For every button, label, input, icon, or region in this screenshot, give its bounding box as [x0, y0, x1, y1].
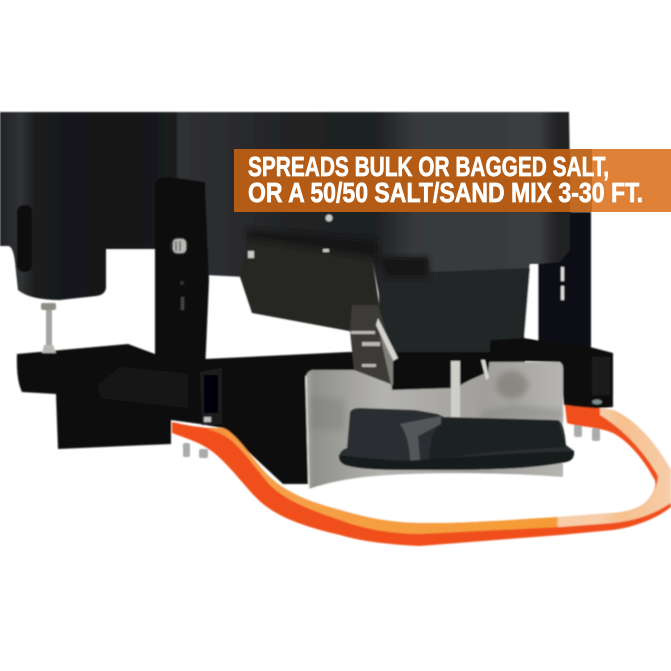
main hopper tank: [177, 112, 571, 300]
spinner disc: [339, 408, 574, 470]
steel latch bracket: [350, 305, 398, 385]
banner strip over dark machine: [234, 149, 570, 212]
banner: [234, 149, 671, 212]
spreader machine: [0, 112, 671, 546]
banner overlap on post: [570, 149, 592, 212]
chute top shadow: [247, 229, 378, 258]
spinner right block: [428, 417, 566, 462]
spinner rim: [339, 451, 574, 470]
spinner vane highlight: [400, 416, 441, 462]
orange guard bar: [172, 405, 671, 546]
left square tube end: [200, 368, 222, 425]
right tube bolt: [592, 400, 602, 404]
right post slots: [561, 267, 564, 300]
small blade strip: [481, 360, 489, 380]
banner strip on white: [234, 149, 671, 212]
under-hopper dark block: [390, 358, 490, 390]
plate stain: [496, 371, 528, 399]
funnel top shadow: [378, 257, 428, 278]
plate shadow: [310, 395, 563, 430]
lower frame left receiver: [17, 344, 525, 484]
tube bolt: [204, 417, 211, 422]
left hopper tank: [0, 112, 178, 300]
right frame assembly: [490, 338, 613, 409]
right support post: [538, 112, 591, 347]
funnel bottom of hopper: [378, 257, 530, 362]
white gap by funnel: [523, 265, 538, 340]
left vertical post: [155, 177, 209, 372]
post bolt: [170, 237, 188, 310]
mounting bolts: [183, 424, 600, 458]
tank recess slot: [17, 205, 32, 272]
steel shaft: [451, 361, 460, 417]
small tank bolts: [248, 214, 332, 258]
left frame highlight: [95, 365, 190, 410]
plate edge: [306, 376, 309, 489]
right tube end: [592, 357, 610, 395]
metal chute: [240, 234, 385, 345]
leveling bolt: [41, 303, 56, 353]
guard bar top face: [207, 408, 671, 534]
steel deflector plate: [306, 362, 563, 489]
